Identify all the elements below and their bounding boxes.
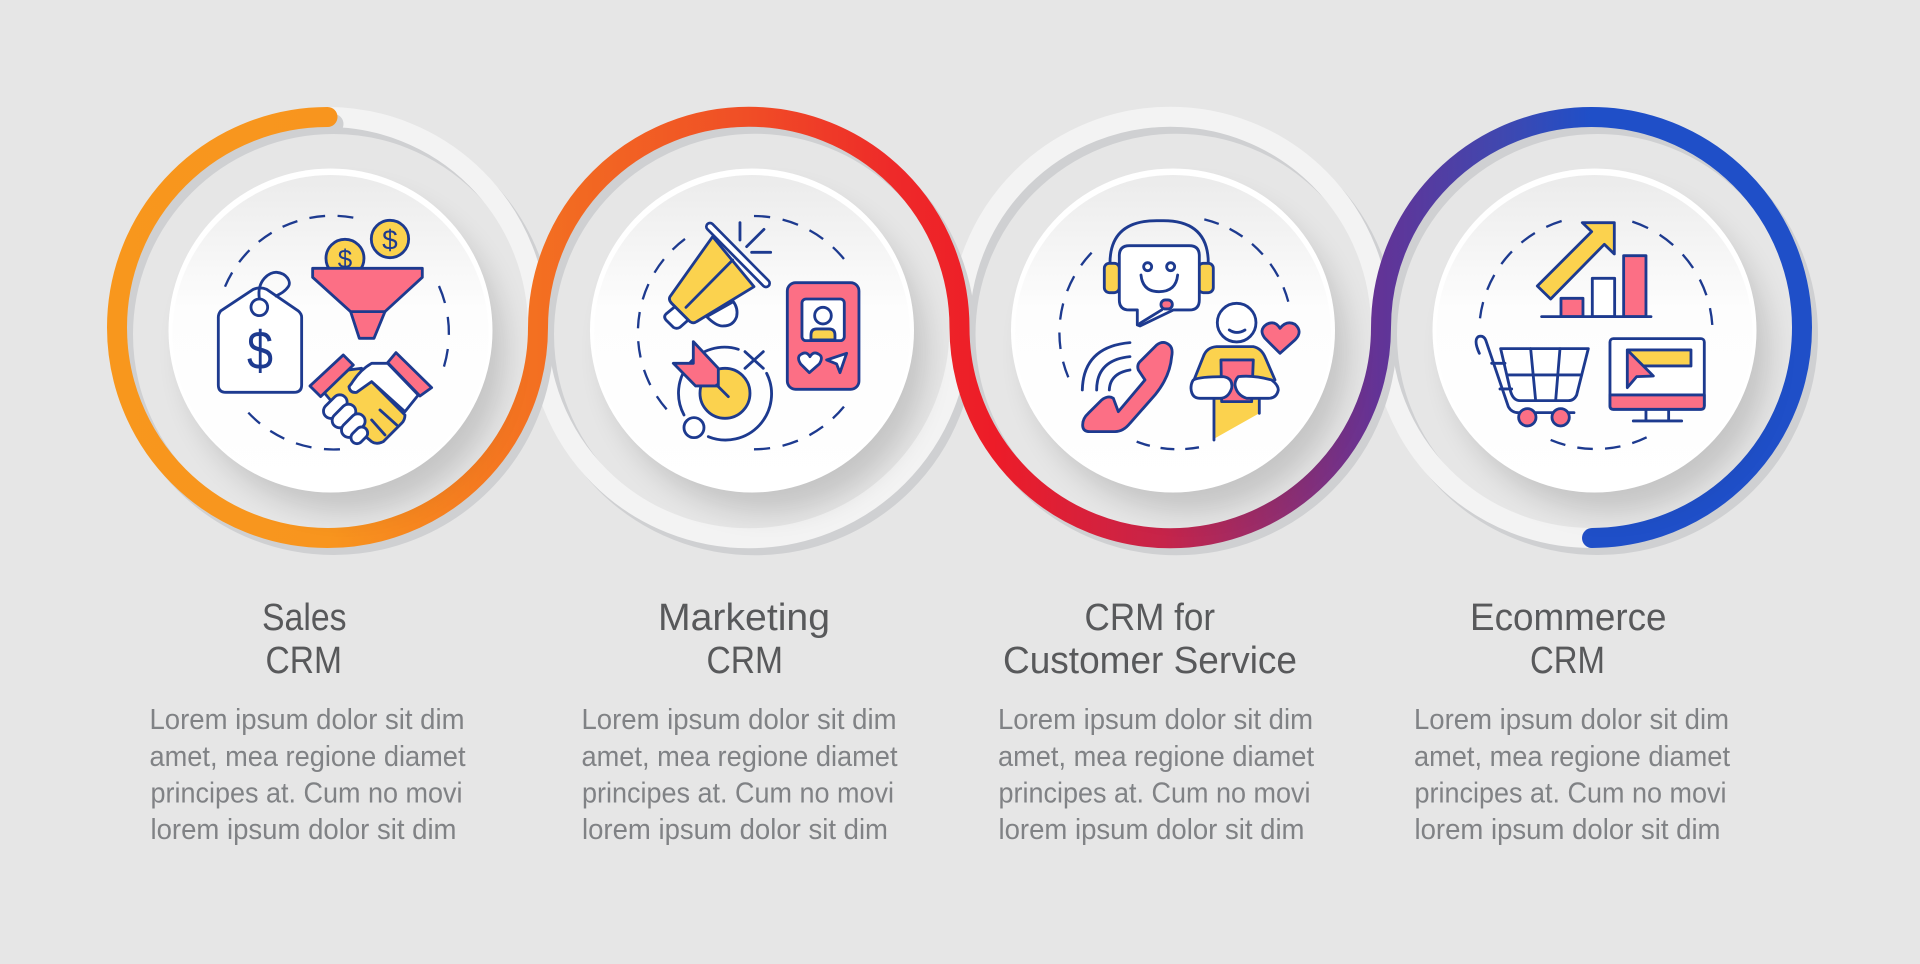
ribbon tracks in light grey with their flat shadows — [328, 117, 1598, 545]
body copy: Marketing CRM — [582, 704, 898, 846]
heading: CRM for Customer Service: CRM for — [1084, 597, 1215, 639]
body copy: Sales CRM — [150, 704, 466, 846]
panel: sales CRM disc — [168, 168, 505, 512]
text block: CRM for Customer Service — [998, 597, 1314, 846]
body copy: Marketing CRM: amet, mea regione diamet — [582, 741, 898, 773]
heading: Ecommerce CRM: CRM — [1530, 640, 1605, 682]
panel: marketing CRM disc — [590, 168, 926, 512]
icon: sales funnel, price tag, handshake: $ — [247, 320, 273, 381]
heading: CRM for Customer Service — [1003, 597, 1297, 682]
icon: sales funnel, price tag, handshake: $ — [382, 224, 398, 255]
body copy: Ecommerce CRM: Lorem ipsum dolor sit dim — [1414, 704, 1729, 736]
heading: Sales CRM — [262, 597, 346, 682]
body copy: Ecommerce CRM: amet, mea regione diamet — [1414, 741, 1730, 773]
panel: customer service CRM disc — [1011, 168, 1348, 512]
body copy: Ecommerce CRM: lorem ipsum dolor sit dim — [1414, 814, 1720, 846]
heading: Sales CRM: CRM — [266, 640, 342, 682]
body copy: CRM for Customer Service — [998, 704, 1314, 846]
heading: Marketing CRM: Marketing — [658, 597, 830, 639]
icon: sales funnel, price tag, handshake: $ — [338, 244, 353, 274]
text block: Marketing CRM — [582, 597, 898, 846]
body copy: Sales CRM: principes at. Cum no movi — [150, 778, 462, 810]
body copy: Marketing CRM: Lorem ipsum dolor sit dim — [582, 704, 896, 736]
body copy: Marketing CRM: lorem ipsum dolor sit dim — [582, 814, 888, 846]
gradient ribbon — [117, 117, 1802, 538]
body copy: Marketing CRM: principes at. Cum no movi — [582, 778, 894, 810]
heading: Marketing CRM: CRM — [706, 640, 783, 682]
heading: Ecommerce CRM: Ecommerce — [1470, 597, 1666, 639]
ribbon shadow — [123, 124, 1808, 545]
heading: CRM for Customer Service: Customer Service — [1003, 640, 1297, 682]
icon: sales funnel, price tag, handshake — [218, 216, 449, 449]
text block: Ecommerce CRM — [1414, 597, 1730, 846]
body copy: CRM for Customer Service: principes at. Cum no movi — [998, 778, 1310, 810]
body copy: Sales CRM: amet, mea regione diamet — [150, 741, 466, 773]
icon: support bot, telephone, happy customer — [1059, 219, 1299, 449]
heading: Ecommerce CRM — [1470, 597, 1666, 682]
panel: ecommerce CRM disc — [1432, 168, 1769, 512]
body copy: Ecommerce CRM — [1414, 704, 1730, 846]
text block: Sales CRM — [150, 597, 466, 846]
body copy: CRM for Customer Service: lorem ipsum dolor sit dim — [998, 814, 1304, 846]
heading: Sales CRM: Sales — [262, 597, 346, 639]
icon: growth chart, shopping cart, monitor — [1476, 221, 1712, 449]
body copy: Sales CRM: Lorem ipsum dolor sit dim — [150, 704, 464, 736]
icon: megaphone, target, social phone — [638, 216, 859, 449]
heading: Marketing CRM — [658, 597, 830, 682]
body copy: Ecommerce CRM: principes at. Cum no movi — [1414, 778, 1726, 810]
body copy: CRM for Customer Service: amet, mea regione diamet — [998, 741, 1314, 773]
body copy: Sales CRM: lorem ipsum dolor sit dim — [150, 814, 456, 846]
body copy: CRM for Customer Service: Lorem ipsum dolor sit dim — [998, 704, 1313, 736]
